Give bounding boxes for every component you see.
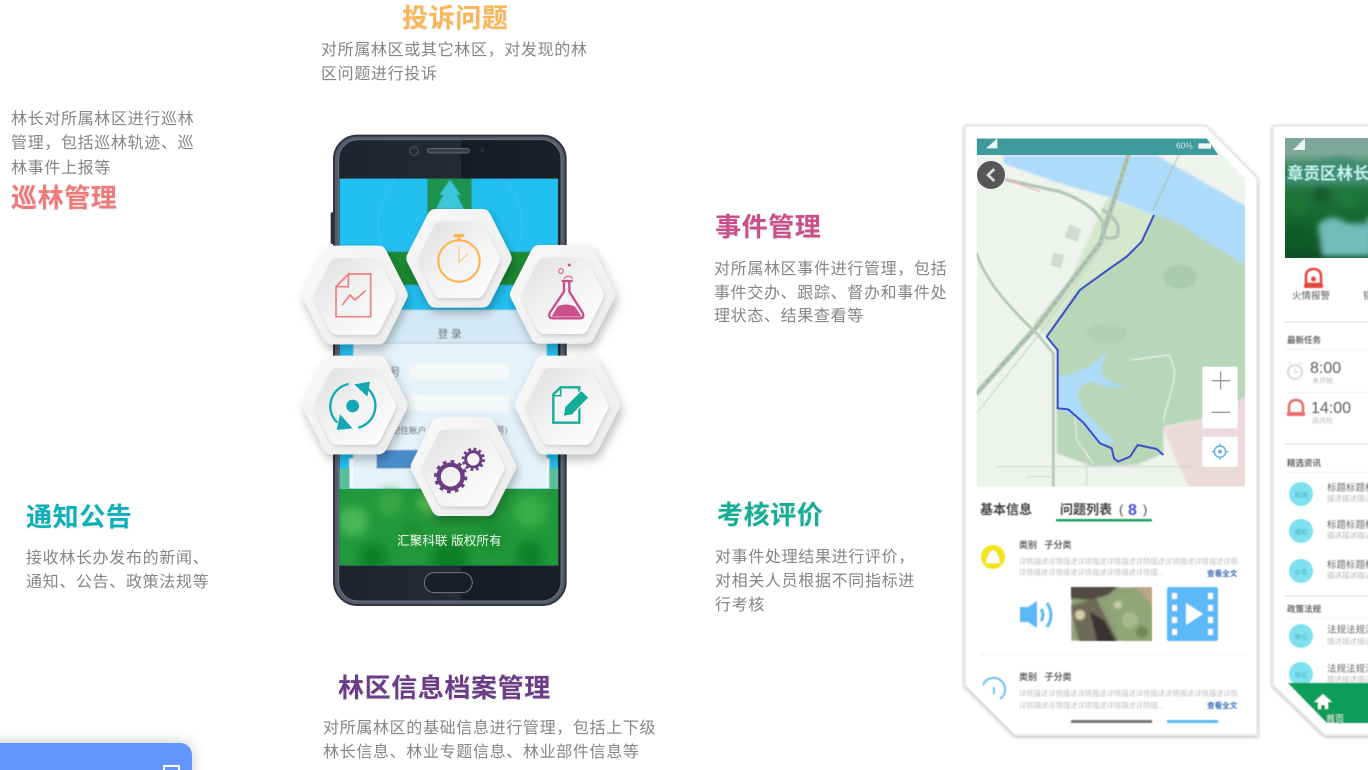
text: 巡林管理说明: 林长对所属林区进行巡林 [11,110,194,128]
policy list: 单位 [1294,670,1308,679]
map: patrol route [1047,215,1163,462]
text: 事件管理说明: 对所属林区事件进行管理，包括 [714,260,947,278]
heading: 事件管理: 事件管理 [715,212,821,242]
hexagon icon: 齿轮 [419,426,507,507]
hexagon icon: 循环同步 [311,364,399,446]
text: 巡林管理说明: 林事件上报等 [11,159,111,177]
text: 通知公告说明 [26,549,209,591]
issue item 1: 类别 子分类 [1019,539,1072,550]
text: 考核评价说明: 对相关人员根据不同指标进 [715,572,915,590]
news list: 通知 [1294,527,1308,536]
heading: 投诉问题: 投诉问题 [402,3,508,33]
text: 林区信息档案管理说明 [323,719,656,761]
zoom control [1202,367,1238,428]
login panel: 记住账户 [392,425,426,436]
logo: tree badge [427,178,472,218]
text: 事件管理说明: 事件交办、跟踪、督办和事件处 [714,284,947,302]
tabs: 8 [1128,502,1137,519]
tabs: 基本信息 [980,502,1032,517]
text: 巡林管理说明: 管理，包括巡林轨迹、巡 [11,134,194,152]
hexagon icon: 秒表 [415,218,503,299]
banner photo [1283,138,1368,258]
menu: 火情报警 [1292,269,1368,302]
map: roads [977,156,1193,487]
phone body [331,136,566,605]
banner photo: 章贡区林长 [1287,163,1368,183]
issue item 1: 详情描述详情描述详情描述详情描述详情描... [1019,568,1164,577]
map: pink district [1164,396,1245,486]
text: 投诉问题说明 [321,41,588,83]
hexagon icon: 文档图表 [311,254,399,336]
login panel [349,310,549,488]
latest tasks: 14:00 [1311,400,1351,417]
news list: 公告 [1294,567,1308,576]
issue item 2: 详情描述详情描述详情描述详情描述详情描述详情描述详情描述详情 [1019,689,1238,698]
hexagon icon: 烧瓶 [519,254,607,335]
text: 林区信息档案管理说明: 林长信息、林业专题信息、林业部件信息等 [323,743,640,761]
map: lake [1057,348,1130,445]
hexagon icon: 编辑文档 [523,364,611,446]
issue item 1: 详情描述详情描述详情描述详情描述详情描述详情描述详情描述详情 [1019,557,1238,566]
copyright text: 汇聚科联 版权所有 [397,533,502,548]
issue item 1 [980,539,1245,655]
latest tasks: 最新任务 [1287,335,1322,345]
map [970,133,1250,493]
heading: 巡林管理: 巡林管理 [11,183,117,213]
phone screen: login page [338,153,558,577]
latest tasks: 8:00 [1310,360,1341,377]
news list: 新闻 [1294,490,1308,499]
policy list [1285,604,1368,686]
issue item 2 [983,671,1238,723]
policy list: 单位 [1294,632,1308,641]
locate button [1202,437,1238,467]
heading: 林区信息档案管理: 林区信息档案管理 [338,673,551,703]
latest tasks: 未开始 [1312,376,1333,385]
tabs: 问题列表 [1060,502,1112,517]
forest band [387,252,530,285]
text: 投诉问题说明: 区问题进行投诉 [321,65,438,83]
latest tasks: 高风险 [1312,416,1333,425]
login panel: 登录 [438,327,464,340]
bottom nav bar: 首页 [1326,713,1344,724]
status bar: 60% [1176,141,1193,151]
heading: 考核评价: 考核评价 [717,500,823,530]
news list: 精选资讯 [1287,458,1322,468]
login panel: 号 [390,367,401,379]
text: 考核评价说明: 行考核 [715,596,765,614]
photo thumbnail [1070,586,1153,642]
map: water [1003,156,1250,268]
issue item 1: 查看全文 [1207,568,1238,578]
app screen card: 巡林地图 [965,126,1257,735]
text: 考核评价说明 [715,548,915,614]
icon: video film [1167,587,1218,641]
text: 林区信息档案管理说明: 对所属林区的基础信息进行管理，包括上下级 [323,719,656,737]
map: light green park [1033,198,1153,337]
blue floating panel [0,743,192,770]
bottom nav bar [1288,683,1368,724]
text: 巡林管理说明 [11,110,194,177]
forest footer [338,468,558,577]
news list [1285,458,1368,583]
tabs: ( [1119,502,1124,517]
text: 事件管理说明 [714,260,947,325]
login panel: (号) [493,425,508,435]
menu: 火情报警: 火情报警 [1292,290,1331,302]
text: 考核评价说明: 对事件处理结果进行评价， [715,548,915,566]
issue item 2: 类别 子分类 [1019,671,1072,682]
text: 事件管理说明: 理状态、结果查看等 [714,307,864,325]
status bar [977,138,1218,155]
issue item 2: 详情描述详情描述详情描述详情描述详情描... [1019,701,1164,710]
back button [977,161,1005,189]
app screen card: 林长首页 [1273,126,1368,735]
tabs: ) [1143,502,1147,517]
text: 投诉问题说明: 对所属林区或其它林区，对发现的林 [321,41,588,59]
tabs [980,502,1152,522]
icon: speaker [1020,601,1051,628]
text: 通知公告说明: 通知、公告、政策法规等 [26,573,209,591]
issue item 2: 查看全文 [1207,700,1238,710]
text: 通知公告说明: 接收林长办发布的新闻、 [26,549,209,567]
policy list: 政策法规 [1287,604,1322,614]
heading: 通知公告: 通知公告 [26,502,132,532]
map: forest [1047,215,1250,467]
latest tasks [1285,335,1368,425]
phone mockup [311,136,611,605]
